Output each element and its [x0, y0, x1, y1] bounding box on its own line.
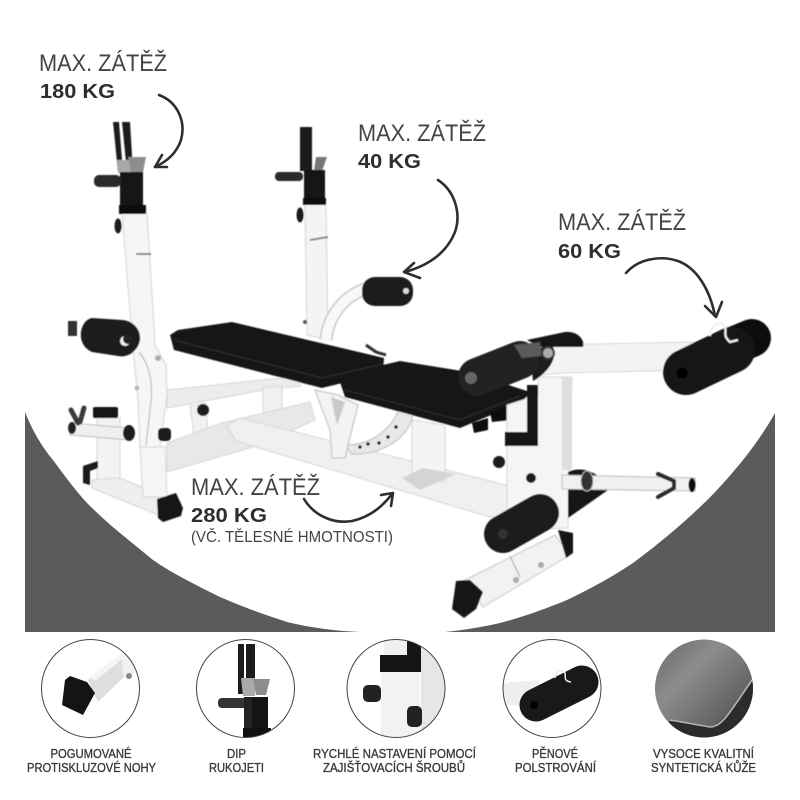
label: 40 kg	[358, 120, 486, 173]
right upright tube	[305, 204, 328, 340]
right rear roller	[735, 338, 752, 345]
rear foot cap	[558, 530, 573, 558]
detail: foam padding	[500, 640, 601, 775]
arrow to 60 kg	[626, 258, 722, 317]
front foot tube	[465, 535, 570, 607]
label: 180 kg: MAX. ZÁTĚŽ	[39, 50, 167, 77]
rear side disc	[568, 469, 608, 518]
label: 60 kg: MAX. ZÁTĚŽ	[558, 209, 686, 236]
detail: foam padding: PĚNOVÉ	[532, 746, 578, 761]
detail: dip handles: RUKOJETI	[209, 760, 264, 775]
arrow to 180 kg	[155, 95, 182, 167]
label: 280 kg	[191, 474, 393, 546]
detail: quick adjustment screws	[313, 639, 476, 775]
label: 40 kg: 40 KG	[358, 151, 421, 173]
right posts	[300, 127, 312, 171]
left handle	[94, 175, 121, 187]
left side bar	[70, 423, 130, 440]
detail: rubber feet: PROTISKLUZOVÉ NOHY	[27, 760, 156, 775]
rubber foot left	[157, 493, 183, 522]
label: 280 kg: (VČ. TĚLESNÉ HMOTNOSTI)	[191, 529, 393, 546]
label: 40 kg: MAX. ZÁTĚŽ	[358, 120, 486, 147]
left saddle	[128, 157, 146, 172]
detail: dip handles	[196, 640, 294, 775]
label: 180 kg	[39, 50, 167, 103]
lower side beam	[167, 402, 315, 472]
label: 280 kg: MAX. ZÁTĚŽ	[191, 474, 320, 501]
seat hinge bracket	[315, 390, 358, 458]
arrow to 280 kg	[304, 493, 393, 522]
detail: synthetic leather: VYSOCE KVALITNÍ	[653, 746, 754, 761]
leg extension beam	[540, 342, 693, 375]
left base post	[97, 418, 120, 482]
label: 60 kg	[558, 209, 686, 263]
right handle	[275, 172, 303, 181]
detail: rubber feet	[27, 640, 156, 775]
lower roller	[503, 513, 540, 534]
right side bar	[562, 475, 695, 491]
seat pad	[340, 361, 530, 428]
rubber foot front	[452, 580, 483, 618]
detail: foam padding: POLSTROVÁNÍ	[515, 760, 596, 775]
left black block	[120, 172, 143, 206]
post cap	[93, 407, 118, 418]
rear side cap	[83, 461, 98, 485]
big right roller	[686, 350, 732, 372]
detail: quick adjustment screws: RYCHLÉ NASTAVENÍ POMOCÍ	[313, 746, 476, 761]
upper roller 40 kg	[362, 277, 413, 306]
detail: synthetic leather: SYNTETICKÁ KŮŽE	[651, 760, 756, 775]
label: 280 kg: 280 KG	[191, 505, 267, 527]
upper cross frame	[167, 376, 300, 408]
detail: rubber feet: POGUMOVANÉ	[50, 746, 132, 761]
left roller	[68, 318, 140, 356]
detail: quick adjustment screws: ZAJIŠŤOVACÍCH ŠROUBŮ	[323, 760, 465, 775]
perforated adjustment disc	[345, 405, 413, 454]
inner rear roller	[527, 332, 583, 347]
arrow to 40 kg	[404, 180, 457, 278]
seat column	[412, 420, 445, 482]
inner roller	[477, 360, 520, 377]
left upright tube	[122, 213, 167, 447]
grey curved background	[25, 412, 775, 632]
right column	[507, 377, 572, 530]
curved roller arm	[326, 288, 368, 340]
back pad	[170, 322, 384, 388]
label: 180 kg: 180 KG	[40, 81, 115, 103]
detail: dip handles: DIP	[227, 746, 246, 761]
detail: synthetic leather	[651, 639, 760, 775]
right black block	[304, 170, 325, 200]
left posts	[113, 122, 123, 172]
label: 60 kg: 60 KG	[558, 241, 621, 263]
bench illustration	[68, 122, 752, 618]
main floor beam	[227, 418, 510, 518]
